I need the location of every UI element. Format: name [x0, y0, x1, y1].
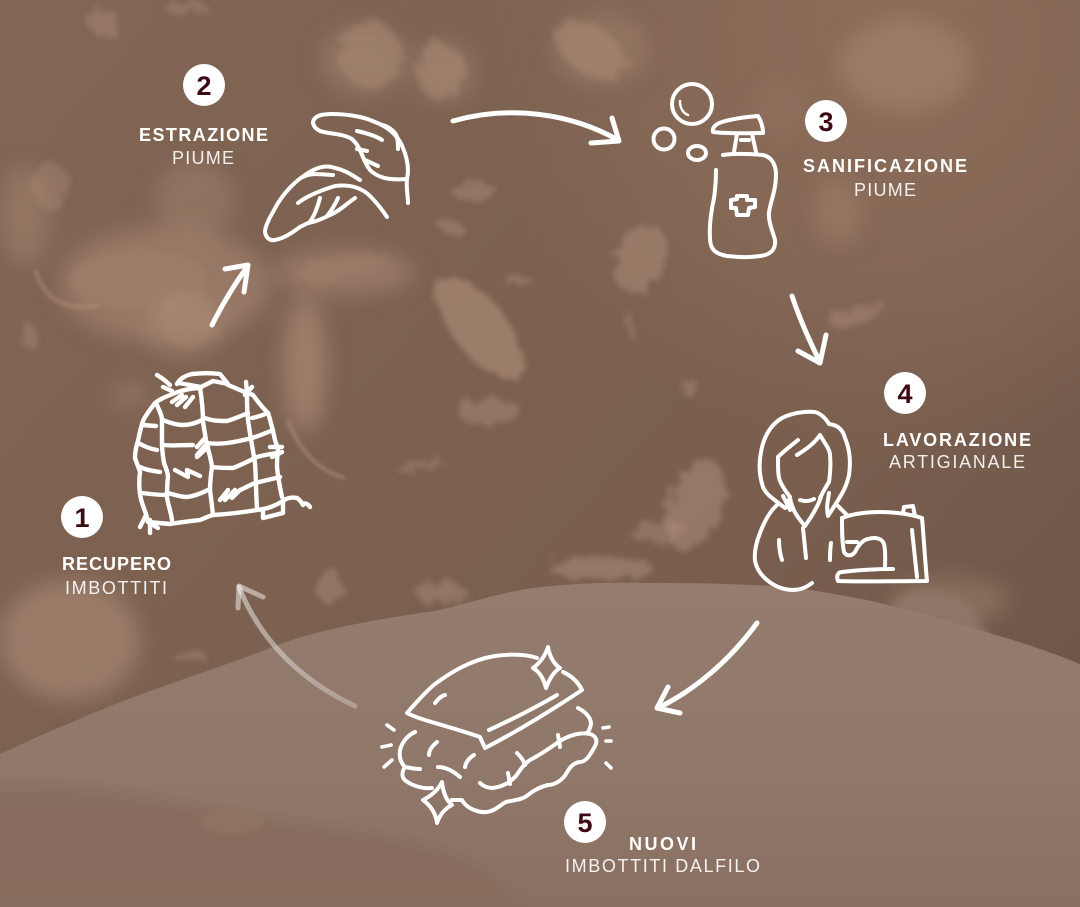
step 4 label: LAVORAZIONE: [883, 430, 1031, 450]
step 5 label: NUOVI: [629, 834, 696, 854]
step 2 label: PIUME: [172, 148, 234, 168]
step 4 label: 4: [897, 379, 913, 409]
step 3 label: 3: [818, 107, 834, 137]
step 2 label: 2: [196, 71, 212, 101]
icon: soap dispenser with bubbles: [654, 84, 776, 257]
icon: stacked pillow and duvet: [382, 647, 611, 823]
step 2 label: [139, 64, 268, 168]
arrow: lavorazione to nuovi imbottiti: [657, 623, 757, 713]
step 2 label: ESTRAZIONE: [139, 125, 268, 145]
step 5 label: IMBOTTITI DALFILO: [565, 856, 760, 876]
step 5 label: [564, 801, 760, 876]
arrow: estrazione to sanificazione: [453, 113, 619, 143]
arrow: sanificazione to lavorazione: [792, 296, 826, 363]
icon: seamstress with sewing machine: [755, 412, 927, 590]
arrow: recupero to estrazione: [212, 265, 248, 325]
step 1 label: IMBOTTITI: [65, 578, 167, 598]
step 3 label: [803, 100, 967, 200]
step 5 label: 5: [577, 808, 593, 838]
icon: two feathers: [265, 114, 408, 240]
step 1 label: [61, 496, 171, 598]
icon: puffer jacket: [135, 373, 310, 533]
step 3 label: SANIFICAZIONE: [803, 156, 967, 176]
step 1 label: 1: [74, 503, 90, 533]
step 3 label: PIUME: [854, 180, 916, 200]
step 1 label: RECUPERO: [62, 554, 171, 574]
step 4 label: ARTIGIANALE: [889, 452, 1025, 472]
step 4 label: [883, 372, 1031, 472]
arrow: nuovi imbottiti to recupero: [238, 586, 355, 706]
